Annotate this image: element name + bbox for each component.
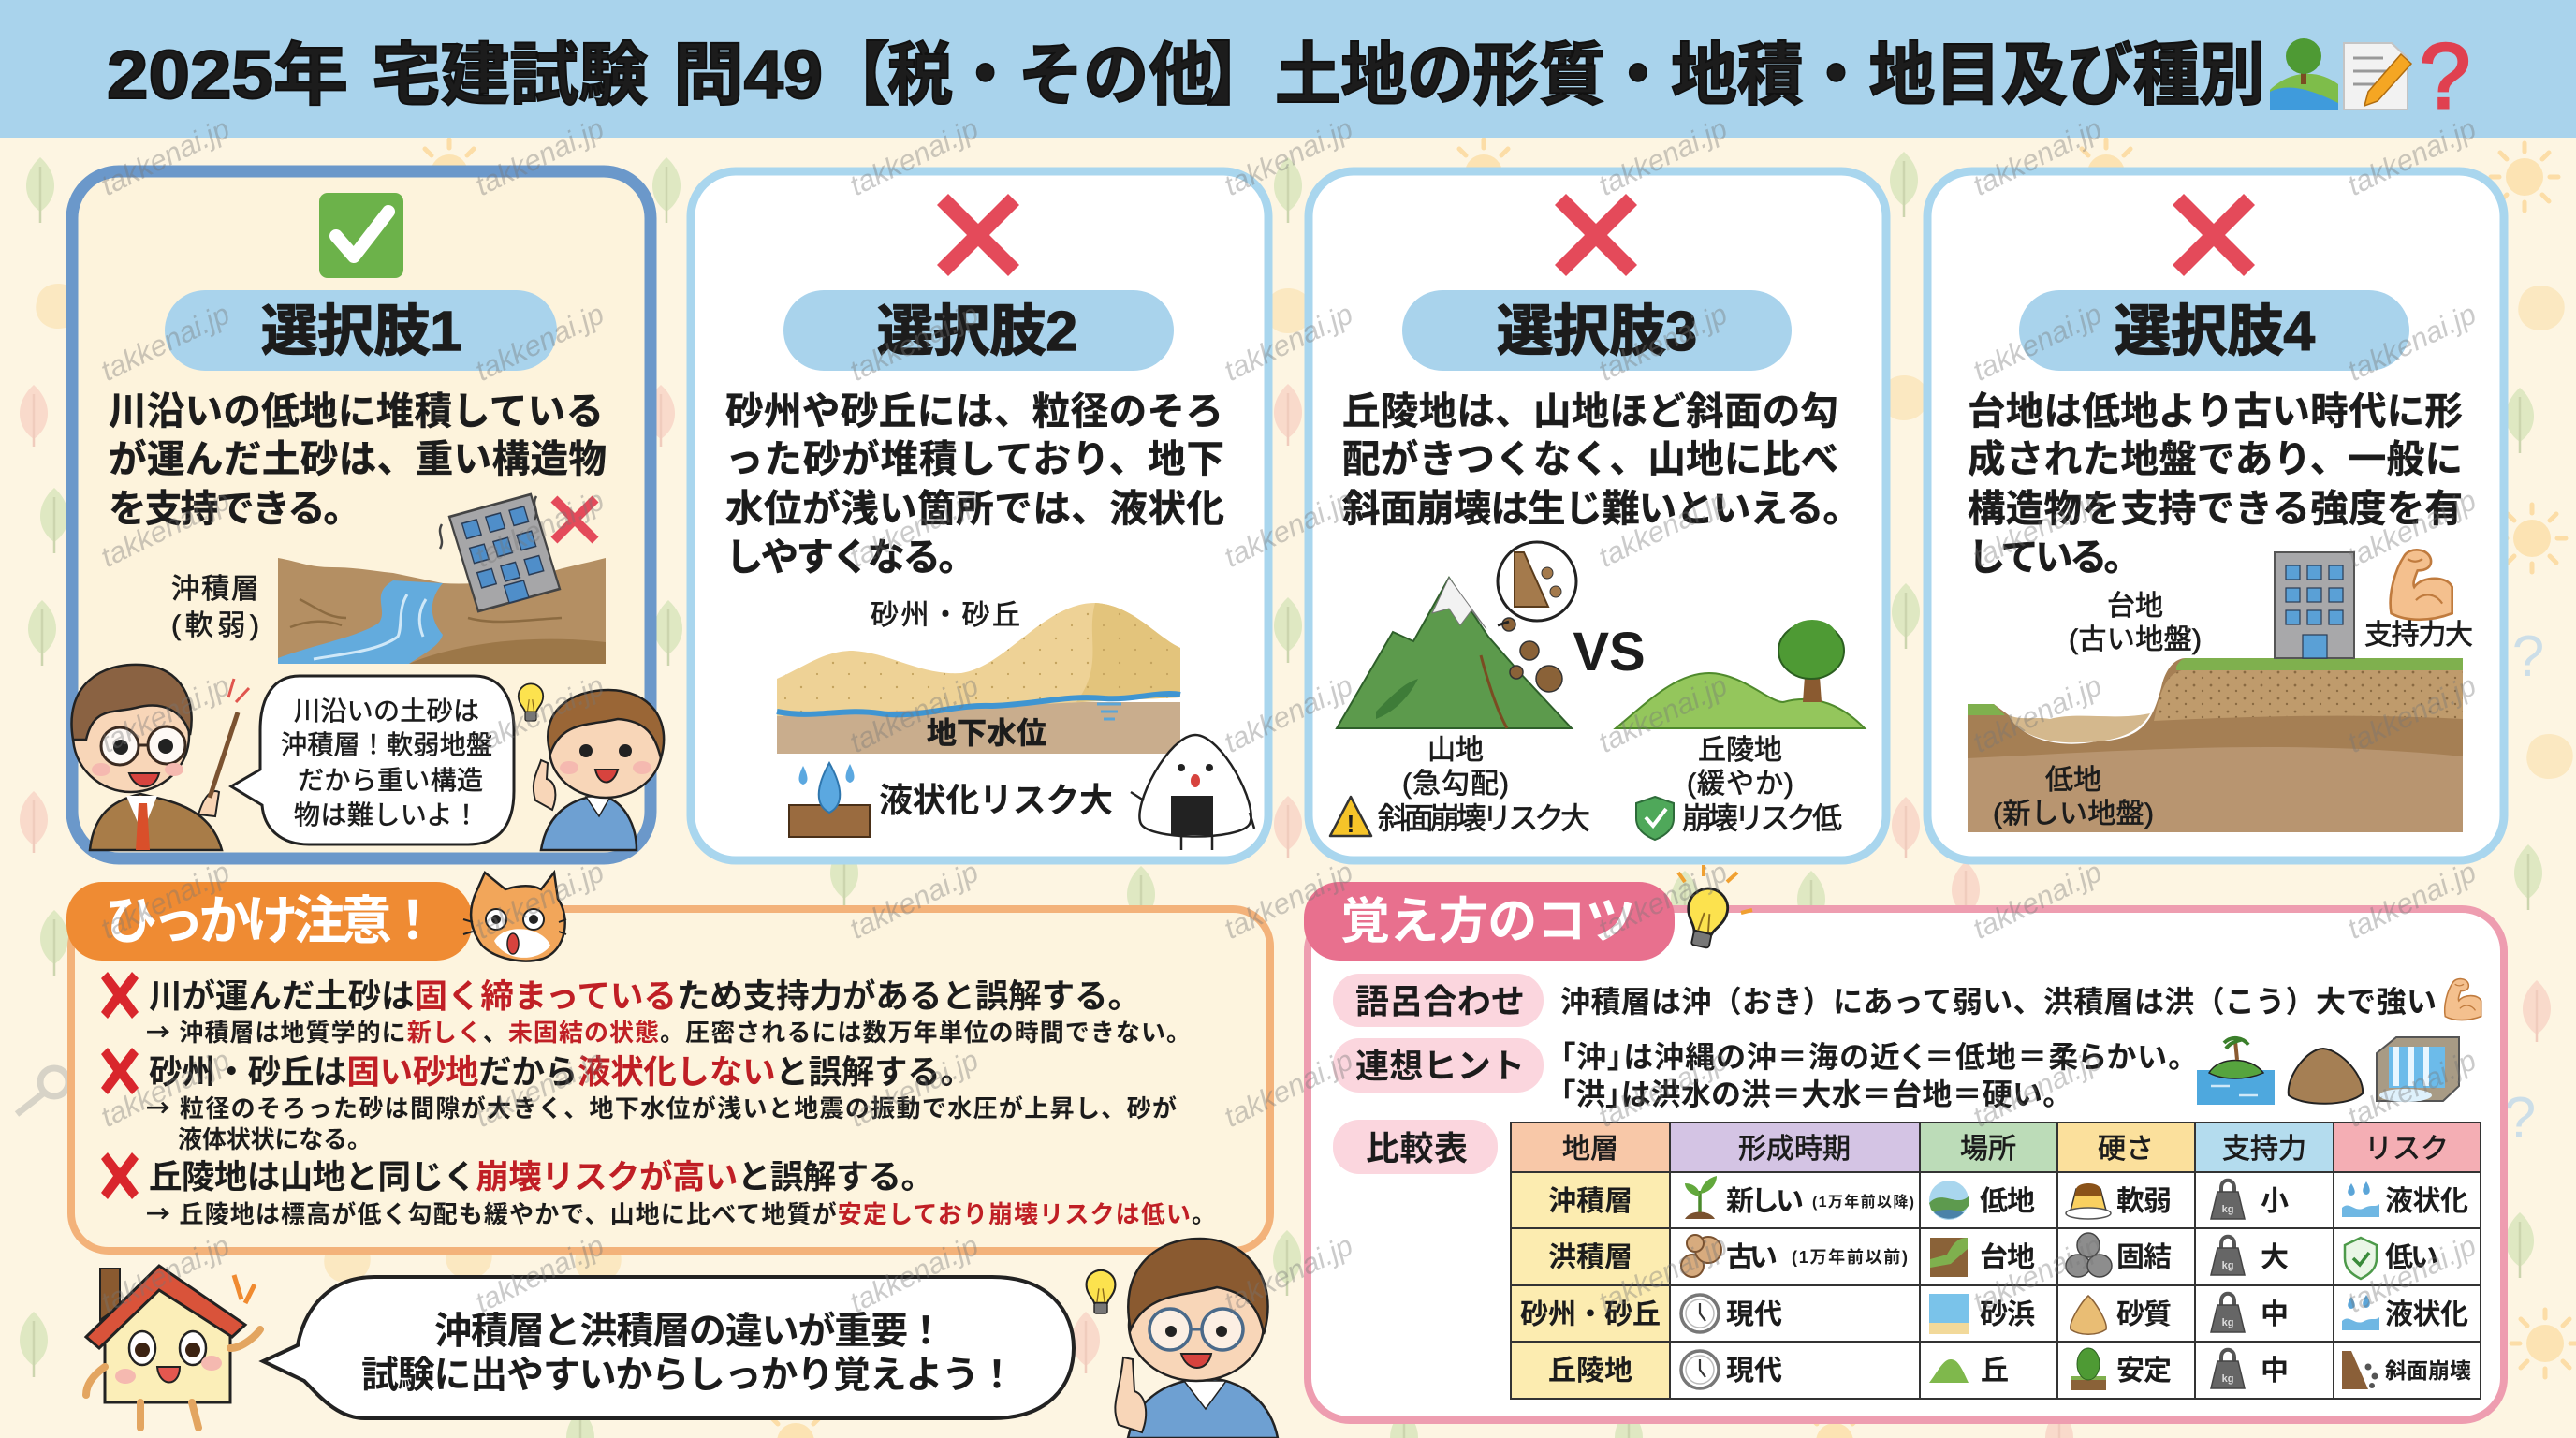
watermarks: takkenai.jp xyxy=(95,1043,235,1134)
text: choice 1 statement: 川沿いの低地に堆積している xyxy=(109,389,604,433)
icon: logs xyxy=(1681,1235,1721,1277)
icon: office building xyxy=(2275,552,2354,658)
background decorations: ? xyxy=(2512,624,2544,689)
comparison table xyxy=(1511,1123,2481,1399)
row: diluvium: (1万年前以前) xyxy=(1792,1247,1908,1267)
heading tab: trap warning xyxy=(66,882,472,961)
label pill: association hint xyxy=(1333,1038,1544,1093)
title text: 2025年 xyxy=(107,37,348,113)
row: hills: 丘陵地 xyxy=(1548,1356,1632,1387)
icon: island xyxy=(2197,1038,2275,1105)
watermarks: takkenai.jp xyxy=(1593,1228,1733,1319)
watermarks: takkenai.jp xyxy=(844,483,984,574)
icon: land emoji xyxy=(2270,38,2338,110)
row: alluvium: 低地 xyxy=(1980,1186,2035,1217)
icon: red x xyxy=(101,1152,139,1199)
watermarks: takkenai.jp xyxy=(95,1228,235,1319)
speech bubble: teacher's explanation: 物は難しいよ！ xyxy=(294,800,479,829)
title text: 土地の形質・地積・地目及び種別 xyxy=(1275,37,2265,113)
watermarks: takkenai.jp xyxy=(1593,855,1733,946)
watermarks: takkenai.jp xyxy=(95,855,235,946)
watermarks: takkenai.jp xyxy=(1219,483,1358,574)
title banner xyxy=(0,0,2576,138)
watermarks: takkenai.jp xyxy=(844,297,984,388)
watermarks: takkenai.jp xyxy=(1968,1228,2107,1319)
icon: lowland xyxy=(1929,1181,1969,1220)
panel: memorization tips xyxy=(1304,865,2504,1420)
icon: red x xyxy=(101,972,139,1019)
row: association hints: 「沖」は沖縄の沖＝海の近く＝低地＝柔らかい。 xyxy=(1560,1040,2183,1074)
watermarks: takkenai.jp xyxy=(95,297,235,388)
panel: choice 4 xyxy=(1927,171,2504,860)
icon: weight xyxy=(2211,1181,2245,1219)
icon: green check xyxy=(319,193,403,278)
label: plateau old ground: (古い地盤) xyxy=(2069,624,2202,655)
watermarks: takkenai.jp xyxy=(1968,855,2107,946)
label: alluvium: (軟弱) xyxy=(171,610,259,641)
heading tab: memorization tips xyxy=(1304,882,1675,961)
row: wordplay xyxy=(1333,974,2481,1027)
watermarks: takkenai.jp xyxy=(470,297,609,388)
watermarks: takkenai.jp xyxy=(1968,668,2107,759)
panel: trap warnings xyxy=(66,873,1270,1251)
icon: sand pile xyxy=(2071,1296,2106,1334)
watermarks: takkenai.jp xyxy=(1219,111,1358,202)
icon: tree on ground xyxy=(2071,1348,2106,1390)
label: hills gentle slope xyxy=(1687,735,1793,800)
misconception 3: → 丘陵地は標高が低く勾配も緩やかで、山地に比べて地質が安定しており崩壊リスクは低い。 xyxy=(146,1196,1216,1230)
misconception 2: → 粒径のそろった砂は間隙が大きく、地下水位が浅いと地震の振動で水圧が上昇し、砂が xyxy=(146,1090,1177,1124)
icon: red x xyxy=(101,1048,139,1094)
label pill: comparison table: 比較表 xyxy=(1366,1129,1468,1167)
heading pill: choice 4 xyxy=(2019,290,2409,371)
row: sandbar and dune: 砂質 xyxy=(2116,1299,2172,1330)
text: choice 2 statement: しやすくなる。 xyxy=(725,536,976,579)
watermarks: takkenai.jp xyxy=(1968,1043,2107,1134)
text: choice 4 statement: 台地は低地より古い時代に形 xyxy=(1968,389,2463,433)
icon: liquefaction water drop xyxy=(789,763,870,837)
watermarks: takkenai.jp xyxy=(1219,668,1358,759)
icon: slope failure xyxy=(2342,1351,2378,1389)
row: wordplay: 沖積層は沖（おき）にあって弱い、洪積層は洪（こう）大で強い xyxy=(1560,985,2437,1019)
row: alluvium: 小 xyxy=(2261,1186,2289,1217)
icon: red x xyxy=(2173,194,2255,276)
speech bubble: exam tip xyxy=(263,1277,1074,1418)
text: choice 4 statement: 成された地盤であり、一般に xyxy=(1968,437,2463,480)
label: groundwater level: 地下水位 xyxy=(927,716,1046,750)
title text: 問49 xyxy=(673,37,823,113)
watermarks: takkenai.jp xyxy=(844,1043,984,1134)
heading pill: choice 1: 選択肢1 xyxy=(261,301,461,362)
icon: lightbulb xyxy=(1087,1270,1115,1313)
heading pill: choice 4: 選択肢4 xyxy=(2115,301,2315,362)
label: high slope failure risk: 斜面崩壊リスク大 xyxy=(1378,801,1590,835)
watermarks: takkenai.jp xyxy=(470,1228,609,1319)
misconception 2 xyxy=(101,1048,1177,1153)
text: choice 3 statement: 配がきつくなく、山地に比べ xyxy=(1342,437,1838,480)
row: alluvium: (1万年前以降) xyxy=(1812,1193,1914,1211)
text: choice 4 statement: している。 xyxy=(1968,536,2142,579)
misconception 1: → 沖積層は地質学的に新しく、未固結の状態。圧密されるには数万年単位の時間できない。 xyxy=(146,1014,1191,1049)
label: mountain steep slope: 山地 xyxy=(1427,735,1484,766)
watermarks: takkenai.jp xyxy=(844,111,984,202)
icon: flexed arm xyxy=(2445,979,2481,1020)
text: choice 3 statement xyxy=(1342,389,1861,530)
watermarks: takkenai.jp xyxy=(470,855,609,946)
icon: green shield xyxy=(1636,797,1674,840)
watermarks: takkenai.jp xyxy=(1593,297,1733,388)
watermarks: takkenai.jp xyxy=(470,668,609,759)
label pill: association hint: 連想ヒント xyxy=(1355,1047,1525,1085)
watermarks: takkenai.jp xyxy=(1968,111,2107,202)
row: diluvium: 洪積層 xyxy=(1548,1242,1632,1273)
watermarks: takkenai.jp xyxy=(1219,855,1358,946)
watermarks: takkenai.jp xyxy=(1593,483,1733,574)
text: choice 2 statement: 砂州や砂丘には、粒径のそろ xyxy=(725,389,1223,433)
icon: plateau xyxy=(1930,1238,1968,1277)
row: sandbar and dune: 中 xyxy=(2261,1299,2289,1330)
icon: warning triangle xyxy=(1330,797,1371,838)
label: alluvium: 沖積層 xyxy=(171,574,259,605)
misconception 3 xyxy=(101,1152,1216,1230)
table headers: 地層 xyxy=(1562,1134,1618,1165)
panel: choice 3 xyxy=(1309,171,1886,860)
text: choice 2 statement xyxy=(725,389,1224,579)
label: mountain steep slope xyxy=(1402,735,1509,800)
misconception 1 xyxy=(101,972,1191,1049)
label pill: comparison table xyxy=(1333,1120,1498,1174)
watermarks: takkenai.jp xyxy=(2342,668,2481,759)
watermarks: takkenai.jp xyxy=(844,668,984,759)
row: alluvium: 液状化 xyxy=(2385,1186,2468,1217)
panel: choice 2 xyxy=(691,171,1268,860)
label: hills gentle slope: (緩やか) xyxy=(1687,769,1793,800)
speech bubble: exam tip: 試験に出やすいからしっかり覚えよう！ xyxy=(361,1355,1016,1396)
watermarks: takkenai.jp xyxy=(95,668,235,759)
character: onigiri xyxy=(1131,735,1254,850)
row: sandbar and dune: 砂州・砂丘 xyxy=(1520,1299,1661,1330)
illustration: building on soft alluvial ground xyxy=(171,494,606,664)
row: hills: 現代 xyxy=(1726,1356,1782,1387)
heading pill: choice 3: 選択肢3 xyxy=(1497,301,1697,362)
row: diluvium xyxy=(1548,1233,2438,1279)
watermarks: takkenai.jp xyxy=(1593,111,1733,202)
watermarks: takkenai.jp xyxy=(1219,1043,1358,1134)
background decorations: ? xyxy=(2504,1086,2536,1151)
icon: mound of soil xyxy=(2289,1049,2363,1104)
icon: custard pudding xyxy=(2066,1183,2111,1219)
watermarks: takkenai.jp xyxy=(1593,668,1733,759)
watermarks: takkenai.jp xyxy=(844,1228,984,1319)
speech bubble: teacher's explanation xyxy=(231,676,514,844)
illustration: gentle hill with tree xyxy=(1616,620,1865,728)
row: alluvium: 軟弱 xyxy=(2116,1186,2172,1217)
character: surprised cat xyxy=(463,873,566,961)
text: choice 1 statement xyxy=(109,389,607,530)
row: diluvium: 台地 xyxy=(1980,1242,2035,1273)
misconception 2: 砂州・砂丘は固い砂地だから液状化しないと誤解する。 xyxy=(149,1053,973,1091)
icon: clock xyxy=(1681,1295,1719,1332)
character: boy with glasses xyxy=(1115,1239,1278,1438)
row: sandbar and dune: 液状化 xyxy=(2385,1299,2468,1330)
row: hills xyxy=(1548,1348,2471,1390)
label: lowland new ground: 低地 xyxy=(2045,765,2101,796)
text: choice 4 statement xyxy=(1968,389,2463,579)
heading tab: memorization tips: 覚え方のコツ xyxy=(1340,894,1635,949)
character: house mascot xyxy=(86,1266,260,1428)
icon: red x xyxy=(1555,194,1637,276)
icon: sprout xyxy=(1685,1176,1717,1219)
heading pill: choice 2: 選択肢2 xyxy=(877,301,1077,362)
icon: weight xyxy=(2211,1350,2245,1388)
icon: weight xyxy=(2211,1294,2245,1332)
speech bubble: teacher's explanation: だから重い構造 xyxy=(298,766,483,795)
icon: red question mark: ? xyxy=(2420,24,2470,127)
label: versus: VS xyxy=(1573,622,1646,682)
table headers: リスク xyxy=(2364,1134,2449,1165)
row: hills: 安定 xyxy=(2116,1356,2172,1387)
label: plateau old ground xyxy=(2069,591,2202,655)
icon: liquefaction xyxy=(2342,1181,2379,1217)
watermarks: takkenai.jp xyxy=(2342,1228,2481,1319)
icon: lightbulb with rays xyxy=(1678,865,1752,950)
speech bubble: teacher's explanation: 川沿いの土砂は xyxy=(294,697,479,726)
label: hills gentle slope: 丘陵地 xyxy=(1698,735,1782,766)
icon: warning triangle: ! xyxy=(1347,810,1354,838)
icon: red x xyxy=(937,194,1019,276)
watermarks: takkenai.jp xyxy=(95,111,235,202)
watermarks: takkenai.jp xyxy=(2342,297,2481,388)
icon: clock xyxy=(1681,1351,1719,1388)
heading pill: choice 3 xyxy=(1402,290,1792,371)
table headers: 形成時期 xyxy=(1738,1134,1851,1165)
character: student xyxy=(534,690,664,850)
text: choice 2 statement: った砂が堆積しており、地下 xyxy=(725,437,1224,480)
title text: 税・その他 xyxy=(887,37,1214,113)
icon: shield xyxy=(2345,1238,2377,1279)
row: hills: 中 xyxy=(2261,1356,2289,1387)
row: diluvium: 大 xyxy=(2261,1242,2289,1273)
panel: choice 1 (correct) xyxy=(72,171,664,858)
watermarks: takkenai.jp xyxy=(470,483,609,574)
illustration: sand dunes and groundwater xyxy=(777,600,1180,754)
title text: 宅建試験 xyxy=(372,37,648,113)
table headers: 硬さ xyxy=(2098,1134,2154,1165)
row: diluvium: 古い xyxy=(1726,1242,1778,1273)
text: choice 1 statement: が運んだ土砂は、重い構造物 xyxy=(109,437,607,480)
text: choice 1 statement: を支持できる。 xyxy=(109,487,361,530)
row: hills: 斜面崩壊 xyxy=(2385,1358,2471,1383)
misconception 2: 液体状状になる。 xyxy=(178,1125,372,1153)
table headers xyxy=(1511,1123,2481,1399)
label pill: wordplay: 語呂合わせ xyxy=(1355,982,1525,1020)
misconception 3: 丘陵地は山地と同じく崩壊リスクが高いと誤解する。 xyxy=(149,1158,934,1196)
heading tab: trap warning: ひっかけ注意！ xyxy=(105,891,439,950)
watermarks: takkenai.jp xyxy=(1968,483,2107,574)
watermarks: takkenai.jp xyxy=(1593,1043,1733,1134)
row: diluvium: 低い xyxy=(2385,1242,2438,1273)
label: alluvium xyxy=(171,574,259,641)
label: bearing capacity: 支持力大 xyxy=(2364,620,2473,651)
text: choice 2 statement: 水位が浅い箇所では、液状化 xyxy=(725,487,1224,530)
row: association hints: 「洪」は洪水の洪＝大水＝台地＝硬い。 xyxy=(1560,1078,2057,1111)
watermarks xyxy=(95,111,2481,1319)
row: sandbar and dune xyxy=(1520,1294,2468,1334)
row: sandbar and dune: 砂浜 xyxy=(1980,1299,2035,1330)
watermarks: takkenai.jp xyxy=(1219,297,1358,388)
character: teacher with pointer xyxy=(72,665,249,850)
label: low failure risk: 崩壊リスク低 xyxy=(1682,801,1842,835)
row: alluvium: 沖積層 xyxy=(1548,1186,1632,1217)
misconception 1: 川が運んだ土砂は固く締まっているため支持力があると誤解する。 xyxy=(149,977,1141,1015)
icon: small red x xyxy=(550,495,599,544)
icon: beach xyxy=(1929,1294,1969,1334)
watermarks: takkenai.jp xyxy=(844,855,984,946)
text: choice 3 statement: 斜面崩壊は生じ難いといえる。 xyxy=(1342,487,1861,530)
row: sandbar and dune: 現代 xyxy=(1726,1299,1782,1330)
title text: 】 xyxy=(1206,37,1274,113)
illustration: plateau and lowland cross-section xyxy=(1968,550,2473,832)
label: sandbar and dune: 砂州・砂丘 xyxy=(871,600,1020,631)
icon: memo and pencil emoji xyxy=(2344,43,2411,110)
row: association hints xyxy=(1333,1037,2459,1111)
watermarks: takkenai.jp xyxy=(2342,855,2481,946)
watermarks: takkenai.jp xyxy=(2342,111,2481,202)
watermarks: takkenai.jp xyxy=(1219,1228,1358,1319)
watermarks: takkenai.jp xyxy=(2342,1043,2481,1134)
label: plateau old ground: 台地 xyxy=(2107,591,2163,622)
icon: flexed arm xyxy=(2391,550,2452,620)
speech bubble: teacher's explanation: 沖積層！軟弱地盤 xyxy=(281,730,492,759)
label: liquefaction risk: 液状化リスク大 xyxy=(879,781,1113,819)
row: alluvium xyxy=(1548,1176,2468,1220)
icon: hill xyxy=(1929,1359,1969,1383)
watermarks: takkenai.jp xyxy=(2342,483,2481,574)
icon: stones xyxy=(2066,1233,2112,1277)
table headers: 場所 xyxy=(1960,1134,2016,1165)
text: choice 3 statement: 丘陵地は、山地ほど斜面の勾 xyxy=(1342,389,1838,433)
label: lowland new ground xyxy=(1993,765,2154,829)
label: mountain steep slope: (急勾配) xyxy=(1402,769,1509,800)
watermarks: takkenai.jp xyxy=(470,1043,609,1134)
heading pill: choice 2 xyxy=(783,290,1174,371)
table headers: 支持力 xyxy=(2222,1134,2306,1165)
illustration: steep mountain with rockfall xyxy=(1337,542,1576,728)
watermarks: takkenai.jp xyxy=(1968,297,2107,388)
watermarks: takkenai.jp xyxy=(95,483,235,574)
watermarks: takkenai.jp xyxy=(470,111,609,202)
speech bubble: exam tip: 沖積層と洪積層の違いが重要！ xyxy=(434,1311,944,1352)
title text: 【 xyxy=(822,37,890,113)
title text xyxy=(107,37,2265,113)
row: hills: 丘 xyxy=(1981,1356,2009,1387)
icon: lightbulb xyxy=(519,683,543,721)
icon: weight xyxy=(2211,1237,2245,1275)
icon: dam with water xyxy=(2377,1037,2459,1102)
row: diluvium: 固結 xyxy=(2116,1242,2172,1273)
heading pill: choice 1 xyxy=(165,290,557,371)
text: choice 4 statement: 構造物を支持できる強度を有 xyxy=(1968,487,2463,530)
icon: landslide bubble xyxy=(1498,542,1576,625)
label pill: wordplay xyxy=(1333,974,1544,1027)
icon: liquefaction xyxy=(2342,1295,2379,1330)
label: lowland new ground: (新しい地盤) xyxy=(1993,799,2154,829)
row: alluvium: 新しい xyxy=(1726,1186,1804,1217)
